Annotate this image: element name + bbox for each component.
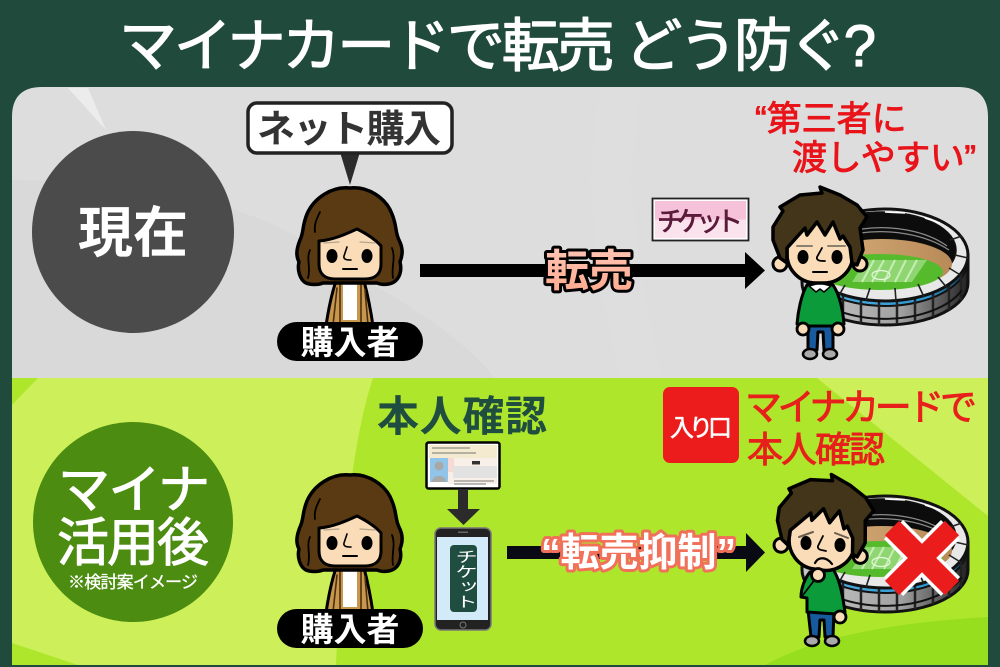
ticket: チケット bbox=[657, 207, 743, 237]
arrow: card to phone bbox=[447, 489, 480, 525]
badge: entrance bbox=[663, 387, 739, 463]
circle: after My Number: 活用後 bbox=[57, 515, 209, 573]
icon: stadium bbox=[802, 209, 968, 325]
icon: woman buyer bbox=[297, 188, 402, 326]
icon: worried man bbox=[771, 468, 878, 646]
icon: man bbox=[773, 187, 867, 359]
text: identity check with My Number card bbox=[745, 387, 977, 470]
icon: woman buyer after bbox=[297, 475, 402, 613]
label: buyer after bbox=[277, 609, 423, 648]
label: resale: 転売 bbox=[545, 247, 633, 296]
icon: stadium after bbox=[802, 496, 968, 612]
icon: smartphone ticket: チケット bbox=[451, 549, 477, 609]
panel: after My Number bbox=[12, 378, 988, 665]
icon: red cross bbox=[892, 528, 952, 588]
quote: easy to hand to third party: 渡しやすい” bbox=[792, 139, 976, 178]
quote: easy to hand to third party: “第三者に bbox=[755, 100, 907, 139]
text: identity check with My Number card: マイナカードで bbox=[745, 387, 977, 428]
circle: current bbox=[32, 131, 234, 333]
badge: entrance: 入り口 bbox=[670, 415, 732, 442]
label: buyer after: 購入者 bbox=[300, 611, 400, 648]
icon: smartphone ticket bbox=[435, 528, 491, 630]
arrow: resale suppressed bbox=[507, 533, 765, 572]
circle: after My Number: マイナ bbox=[58, 462, 210, 520]
label: buyer bbox=[277, 322, 423, 361]
circle: current: 現在 bbox=[78, 202, 188, 264]
circle: after My Number: ※検討案イメージ bbox=[68, 573, 198, 592]
label: buyer: 購入者 bbox=[300, 324, 400, 361]
ticket bbox=[652, 198, 748, 240]
title: マイナカードで転売 どう防ぐ? bbox=[119, 14, 876, 79]
quote: easy to hand to third party bbox=[755, 100, 976, 178]
arrow: resale bbox=[420, 252, 765, 289]
panel: current bbox=[12, 87, 988, 378]
speech bubble: net purchase: ネット購入 bbox=[257, 109, 441, 151]
circle: after My Number bbox=[33, 422, 233, 622]
icon: My Number card bbox=[426, 442, 500, 488]
speech bubble: net purchase bbox=[248, 103, 452, 185]
label: resale suppression: “転売抑制” bbox=[541, 532, 736, 575]
text: identity check with My Number card: 本人確認 bbox=[747, 429, 885, 470]
heading: identity check: 本人確認 bbox=[377, 393, 547, 440]
